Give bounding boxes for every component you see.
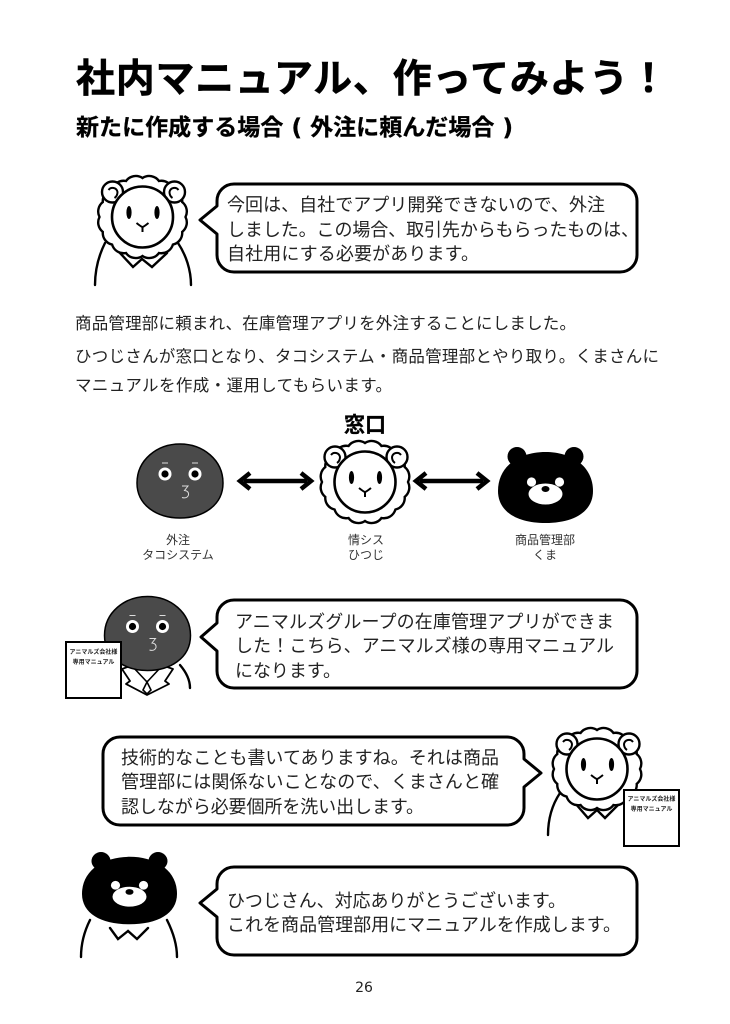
manual document: アニマルズ会社様 xyxy=(70,648,117,656)
character: sheep with manual xyxy=(548,728,679,846)
diagram label: product management xyxy=(515,532,575,562)
manual document: 専用マニュアル xyxy=(631,805,672,813)
diagram icon: bear xyxy=(498,447,593,523)
diagram label: IT department: ひつじ xyxy=(348,548,384,562)
speech bubble 2: アニマルズグループの在庫管理アプリができま xyxy=(235,612,614,633)
diagram label: outsourcer: タコシステム xyxy=(142,548,214,562)
manual document xyxy=(624,790,679,846)
speech bubble 2: になります。 xyxy=(235,661,341,682)
speech bubble 1: しました。この場合、取引先からもらったものは、 xyxy=(227,220,639,241)
intro paragraph: ひつじさんが窓口となり、タコシステム・商品管理部とやり取り。くまさんに xyxy=(75,347,659,366)
speech bubble 1 xyxy=(200,184,639,272)
intro paragraph: マニュアルを作成・運用してもらいます。 xyxy=(75,376,392,395)
speech bubble 4: これを商品管理部用にマニュアルを作成します。 xyxy=(227,915,621,936)
page number: 26 xyxy=(355,980,373,996)
diagram icon: octopus xyxy=(137,444,223,518)
diagram label: product management: くま xyxy=(533,548,557,562)
heading: contact point: 窓口 xyxy=(344,413,386,437)
character: octopus in suit with manual xyxy=(66,596,190,698)
speech bubble 2 xyxy=(201,600,637,688)
diagram label: product management: 商品管理部 xyxy=(515,532,575,547)
speech bubble 4 xyxy=(200,867,637,955)
speech bubble 2: した！こちら、アニマルズ様の専用マニュアル xyxy=(235,636,614,657)
speech bubble 3 xyxy=(103,737,541,825)
speech bubble 3: 技術的なことも書いてありますね。それは商品 xyxy=(121,748,499,769)
speech bubble 1: 今回は、自社でアプリ開発できないので、外注 xyxy=(227,195,605,216)
manual document: アニマルズ会社様 xyxy=(628,795,675,803)
manual document xyxy=(66,642,121,698)
intro paragraph xyxy=(75,314,659,395)
character: bear xyxy=(81,852,177,957)
subtitle: 新たに作成する場合 ( 外注に頼んだ場合 ) xyxy=(76,115,513,141)
character: sheep explaining outsourcing xyxy=(95,176,191,285)
title: 社内マニュアル、作ってみよう！ xyxy=(76,57,668,102)
arrow: sheep to bear xyxy=(416,473,487,489)
diagram icon: sheep xyxy=(321,441,409,523)
speech bubble 3: 管理部には関係ないことなので、くまさんと確 xyxy=(121,772,499,793)
diagram label: outsourcer xyxy=(142,533,214,562)
diagram label: IT department xyxy=(348,533,384,562)
arrow: octopus to sheep xyxy=(240,473,311,489)
speech bubble 1: 自社用にする必要があります。 xyxy=(227,244,479,265)
diagram label: outsourcer: 外注 xyxy=(166,533,190,547)
intro paragraph: 商品管理部に頼まれ、在庫管理アプリを外注することにしました。 xyxy=(75,314,576,333)
diagram label: IT department: 情シス xyxy=(348,533,384,547)
manual document: 専用マニュアル xyxy=(73,658,114,666)
speech bubble 4: ひつじさん、対応ありがとうございます。 xyxy=(227,890,566,912)
speech bubble 3: 認しながら必要個所を洗い出します。 xyxy=(121,797,424,818)
